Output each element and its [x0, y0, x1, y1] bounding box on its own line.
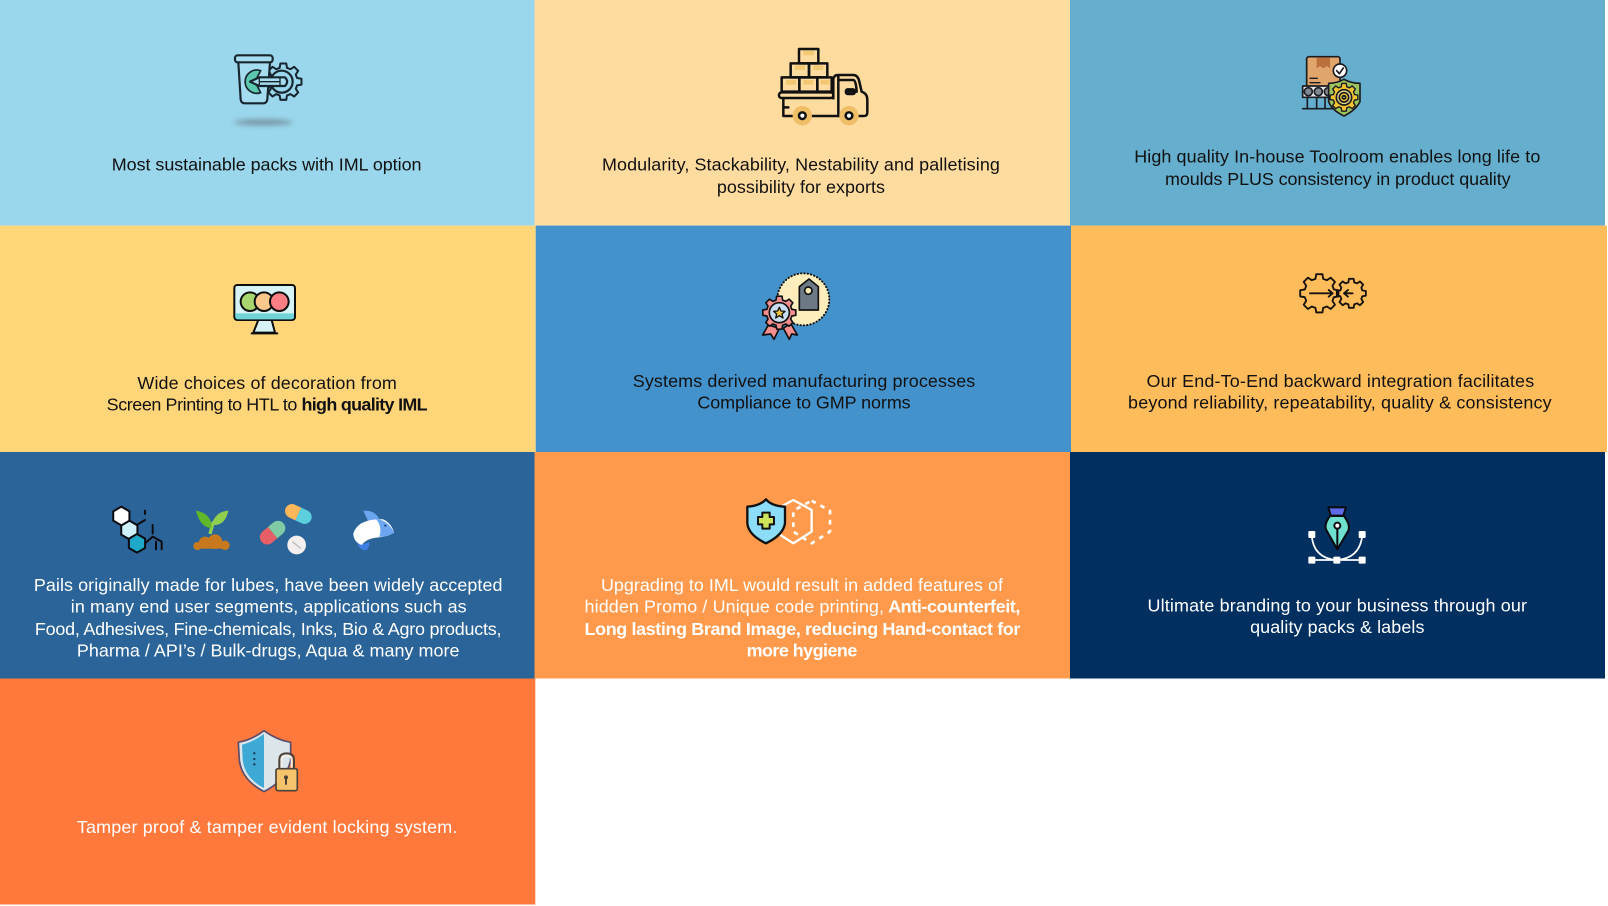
icon: shield with padlock	[238, 731, 297, 792]
panel: systems and GMP	[536, 226, 1071, 452]
text: decoration	[107, 373, 428, 414]
text: toolroom: moulds PLUS consistency in product quality	[1165, 169, 1511, 189]
panel: end user segments	[0, 452, 534, 678]
text: systems and GMP	[633, 371, 975, 412]
icon: pen nib with bezier curve	[1308, 507, 1366, 564]
icon: fish	[353, 511, 394, 550]
text: ultimate branding: quality packs & labels	[1250, 617, 1424, 637]
text: end user segments: Pharma / API’s / Bulk-drugs, Aqua & many more	[77, 641, 459, 661]
panel: backward integration	[1071, 226, 1607, 452]
text: end user segments: Food, Adhesives, Fine-chemicals, Inks, Bio & Agro products,	[35, 619, 501, 639]
text: modularity: possibility for exports	[717, 177, 885, 197]
panel: ultimate branding	[1070, 452, 1605, 678]
text: IML upgrade	[585, 575, 1020, 661]
icon: monitor with circles	[234, 285, 295, 333]
text: modularity: Modularity, Stackability, Nestability and palletising	[602, 155, 1000, 175]
panel: IML upgrade	[534, 452, 1070, 678]
text: IML upgrade: hidden Promo / Unique code printing,	[585, 597, 884, 617]
panel: modularity	[534, 0, 1070, 226]
text: end user segments: Pails originally made for lubes, have been widely accepted	[34, 575, 502, 595]
text: toolroom	[1134, 146, 1540, 189]
icon: chemical molecule	[113, 507, 162, 553]
icon: rosette and tag	[763, 273, 829, 339]
panel: sustainable packs	[0, 0, 534, 226]
text: sustainable packs: Most sustainable packs with IML option	[112, 155, 421, 175]
text: decoration: Screen Printing to HTL to	[107, 394, 297, 414]
text: end user segments	[34, 575, 502, 661]
text: ultimate branding: Ultimate branding to your business through our	[1148, 595, 1527, 615]
icon: pills and tablet	[257, 502, 314, 554]
text: IML upgrade: more hygiene	[747, 641, 857, 661]
text: toolroom: High quality In-house Toolroom enables long life to	[1134, 146, 1540, 166]
text: backward integration: Our End-To-End backward integration facilitates	[1147, 371, 1534, 391]
text: decoration: high quality IML	[301, 394, 428, 414]
text: end user segments: in many end user segments, applications such as	[71, 597, 467, 617]
text: decoration: Wide choices of decoration from	[137, 373, 397, 393]
text: modularity	[602, 155, 1000, 197]
icon: truck with boxes	[779, 49, 867, 125]
icon: plant sprout	[193, 511, 230, 550]
text: systems and GMP: Systems derived manufacturing processes	[633, 371, 975, 391]
text: backward integration: beyond reliability, repeatability, quality & consistency	[1128, 392, 1552, 412]
text: ultimate branding	[1148, 595, 1527, 637]
icon: shield with hexagons	[747, 499, 830, 543]
icon: two gears with arrows	[1300, 274, 1366, 312]
icon: box on conveyor with shield	[1303, 57, 1360, 116]
icon: cup with gear and pencil	[234, 55, 301, 125]
text: IML upgrade: Long lasting Brand Image, reducing Hand-contact for	[585, 619, 1020, 639]
text: systems and GMP: Compliance to GMP norms	[697, 392, 911, 412]
panel: toolroom	[1070, 0, 1605, 226]
text: IML upgrade: Upgrading to IML would result in added features of	[601, 575, 1004, 595]
text: backward integration	[1128, 371, 1552, 412]
text: IML upgrade: Anti-counterfeit,	[888, 597, 1020, 617]
panel: tamper proof	[0, 678, 535, 904]
panel: decoration	[0, 226, 536, 452]
text: tamper proof: Tamper proof & tamper evident locking system.	[77, 817, 457, 837]
